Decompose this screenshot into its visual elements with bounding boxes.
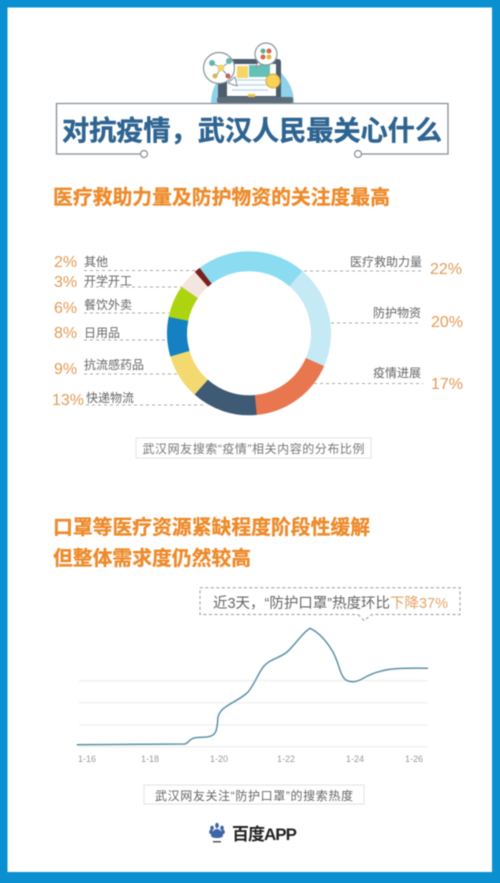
left legend: 开学开工 3%: 开学开工 <box>84 273 132 288</box>
logo: 百度APP <box>209 823 297 844</box>
logo: 百度APP: 百度APP <box>232 825 297 844</box>
right legend: 医疗救助力量 22%: 医疗救助力量 <box>350 254 422 269</box>
left legend: 开学开工 3%: 3% <box>54 274 77 291</box>
x axis labels: 1-20 <box>210 754 228 764</box>
left legend: 日用品 8%: 日用品 <box>84 326 120 340</box>
left legend: 快递物流 13%: 13% <box>52 392 84 409</box>
left legend: 日用品 8% <box>54 325 167 342</box>
left legend: 其他 2% <box>54 254 196 271</box>
callout: 近3天，“防护口罩”热度环比下降37% <box>213 595 448 612</box>
left legend: 抗流感药品 9% <box>54 357 178 378</box>
x axis labels: 1-16 <box>78 754 96 764</box>
left legend: 快递物流 13%: 快递物流 <box>86 391 134 405</box>
right legend: 医疗救助力量 22%: 22% <box>430 261 462 278</box>
right legend: 疫情进展 17%: 17% <box>431 376 463 393</box>
x axis labels: 1-22 <box>277 754 295 764</box>
right legend: 防护物资 20% <box>331 305 463 331</box>
left legend: 餐饮外卖 6%: 6% <box>54 300 77 317</box>
left legend: 开学开工 3% <box>54 273 181 291</box>
x axis labels <box>78 754 423 764</box>
heading: section two: 口罩等医疗资源紧缺程度阶段性缓解 <box>53 516 370 539</box>
left legend: 快递物流 13% <box>52 391 204 409</box>
donut caption <box>136 438 371 458</box>
right legend: 防护物资 20%: 防护物资 <box>373 305 421 320</box>
icon: baidu paw <box>209 823 225 842</box>
right legend: 疫情进展 17% <box>314 365 463 393</box>
callout <box>200 588 460 620</box>
heading: section two: 但整体需求度仍然较高 <box>53 547 251 570</box>
left legend: 餐饮外卖 6% <box>54 297 169 317</box>
chart caption <box>144 785 364 804</box>
right legend: 疫情进展 17%: 疫情进展 <box>373 365 421 380</box>
heading: section two <box>53 516 370 570</box>
line chart <box>77 628 428 764</box>
x axis labels: 1-26 <box>405 754 423 764</box>
right legend: 防护物资 20%: 20% <box>431 314 463 331</box>
title text: 对抗疫情，武汉人民最关心什么 <box>62 115 442 146</box>
left legend: 其他 2%: 其他 <box>84 255 108 269</box>
x axis labels: 1-24 <box>346 754 364 764</box>
left legend: 日用品 8%: 8% <box>54 325 77 342</box>
title box <box>56 104 448 158</box>
x axis labels: 1-18 <box>141 754 159 764</box>
left legend: 餐饮外卖 6%: 餐饮外卖 <box>84 297 132 312</box>
left legend: 其他 2%: 2% <box>54 254 77 271</box>
icon: laptop with speech bubbles <box>204 43 294 103</box>
donut chart <box>147 232 351 435</box>
chart caption: 武汉网友关注“防护口罩”的搜索热度 <box>155 788 353 803</box>
right legend: 医疗救助力量 22% <box>304 254 462 278</box>
left legend: 抗流感药品 9%: 9% <box>54 361 77 378</box>
donut caption: 武汉网友搜索“疫情”相关内容的分布比例 <box>142 441 364 456</box>
left legend: 抗流感药品 9%: 抗流感药品 <box>84 357 144 372</box>
heading: section one: 医疗救助力量及防护物资的关注度最高 <box>53 186 390 209</box>
